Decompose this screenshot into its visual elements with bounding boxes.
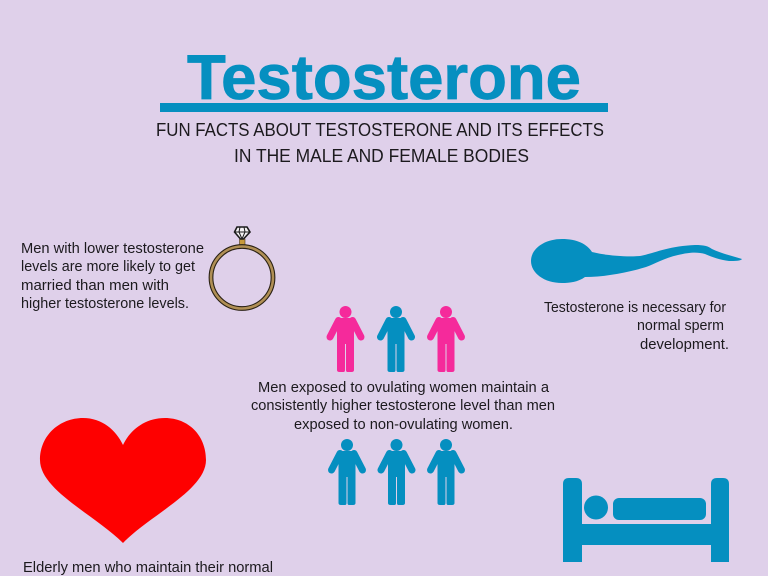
text: ovulation fact	[251, 380, 555, 433]
text: sperm fact	[544, 300, 729, 353]
person: blue	[381, 439, 412, 505]
person: blue	[380, 306, 412, 372]
subtitle: FUN FACTS ABOUT TESTOSTERONE AND ITS EFFECTS	[156, 120, 604, 140]
icon: sperm	[531, 239, 742, 283]
text: marriage fact: Men with lower testosterone	[21, 241, 204, 257]
subtitle	[156, 120, 604, 166]
text: elderly men fact: Elderly men who maintain their normal	[23, 560, 273, 576]
text: marriage fact	[21, 241, 204, 312]
text: sperm fact: development.	[640, 337, 729, 353]
title: Testosterone	[187, 43, 581, 113]
text: marriage fact: married than men with	[21, 278, 169, 294]
subtitle: IN THE MALE AND FEMALE BODIES	[234, 146, 529, 166]
person: blue	[332, 439, 362, 505]
text: marriage fact: levels are more likely to get	[21, 259, 195, 275]
text: sperm fact: normal sperm	[637, 318, 724, 334]
icon: bottom row of people	[332, 439, 462, 505]
text: marriage fact: higher testosterone levels.	[21, 296, 189, 312]
text: sperm fact: Testosterone is necessary for	[544, 300, 726, 316]
person: pink	[430, 306, 462, 372]
person: pink	[330, 306, 361, 372]
title underline	[160, 103, 608, 112]
icon: bed	[563, 478, 729, 562]
icon: diamond ring	[211, 227, 273, 308]
text: ovulation fact: Men exposed to ovulating women maintain a	[258, 380, 550, 396]
text: ovulation fact: exposed to non-ovulating women.	[294, 417, 513, 433]
person: blue	[430, 439, 462, 505]
icon: heart	[40, 418, 206, 543]
icon: top row of people	[330, 306, 462, 372]
text: ovulation fact: consistently higher testosterone level than men	[251, 398, 555, 414]
